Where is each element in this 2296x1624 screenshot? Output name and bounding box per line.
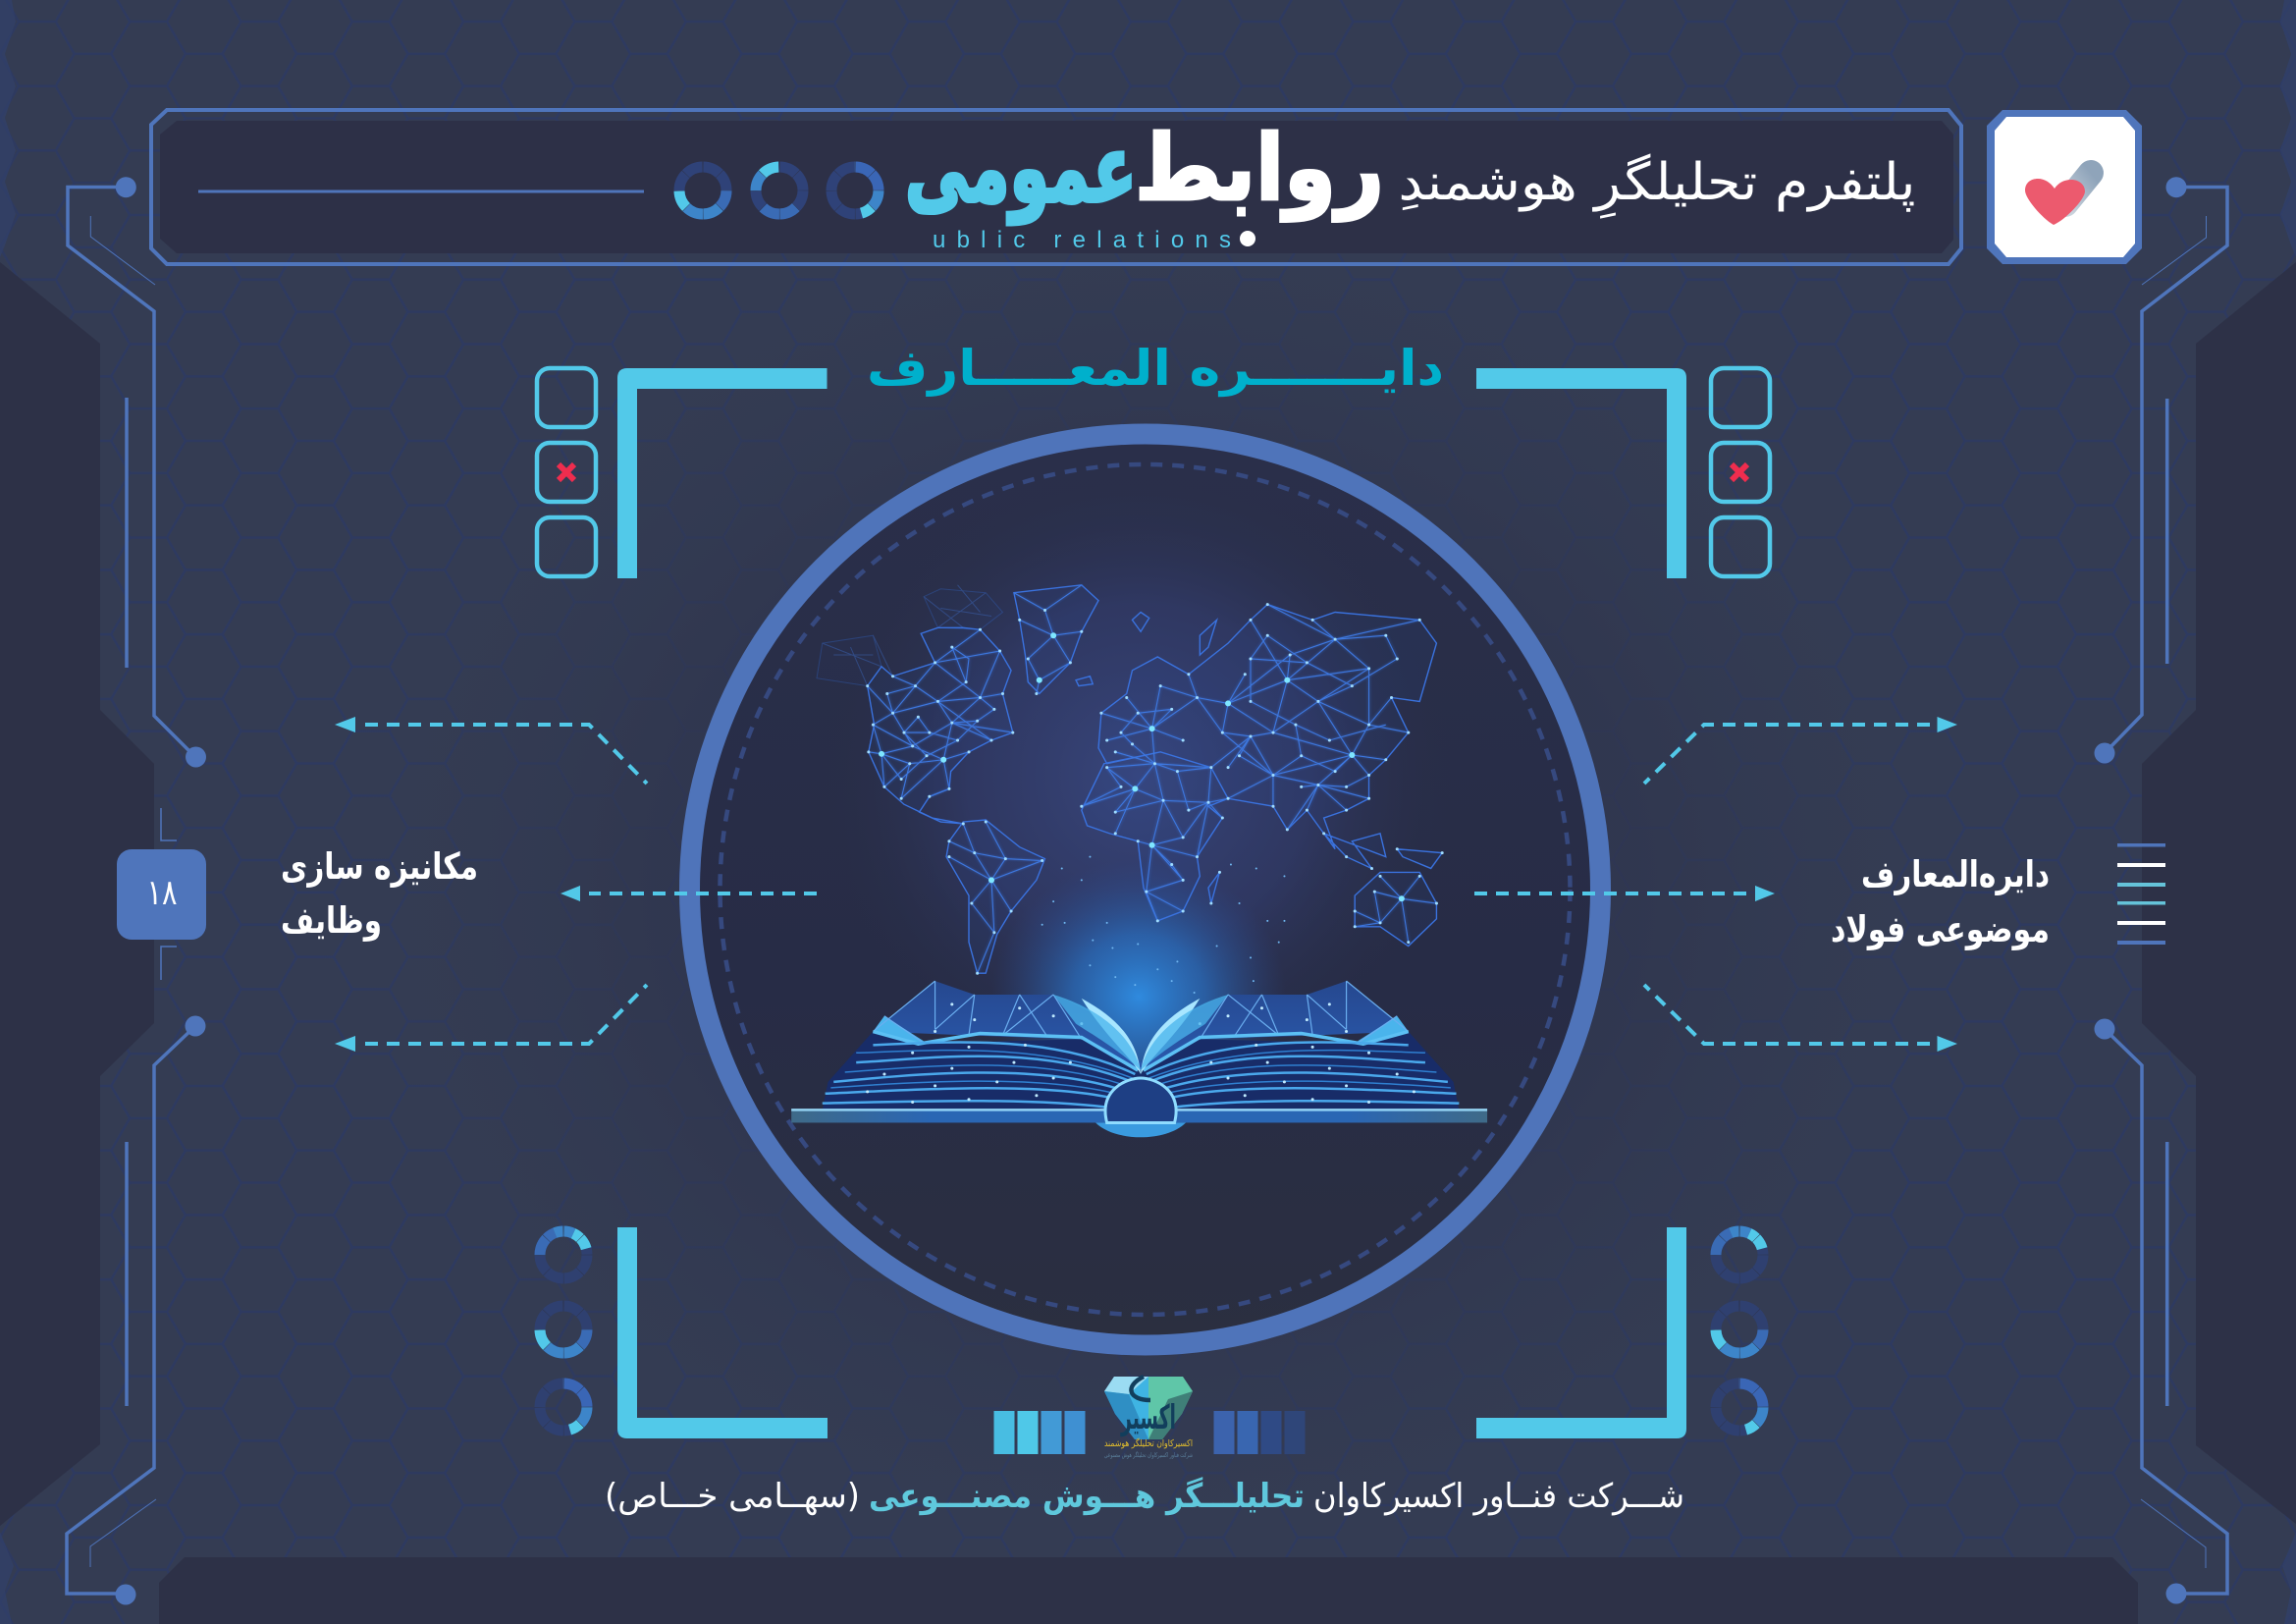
- footer company name: [605, 1477, 1684, 1516]
- left label: مکانیزه سازی: [281, 845, 478, 888]
- header frame: [151, 110, 1961, 264]
- bottom donut right 2: [1716, 1306, 1763, 1353]
- logo sub caption: شرکت فناور اکسیرکاوان تحلیلگر هوش مصنوعی: [1104, 1451, 1193, 1459]
- sparkles above the book: [1042, 857, 1284, 993]
- bottom donut left 1: [540, 1231, 587, 1278]
- icon: red cross: [559, 464, 574, 480]
- header donut 3: [831, 167, 879, 214]
- header title: پلتفرم تحلیلگرِ هوشمندِ: [1398, 153, 1916, 220]
- logo word cyan: عمومی: [905, 114, 1137, 225]
- icon: red cross right: [1732, 464, 1747, 480]
- continent outlines: [868, 585, 1442, 973]
- bracket: top right: [1476, 368, 1686, 578]
- network nodes: [868, 605, 1442, 973]
- arrow: left top: [335, 717, 647, 784]
- logo word white: روابط: [1135, 116, 1384, 222]
- central disc with world map and book: [687, 432, 1602, 1347]
- footer company name: (سهــامی خـــاص): [605, 1477, 860, 1516]
- arrow: right top: [1644, 717, 1957, 784]
- arrow: right bottom: [1644, 985, 1957, 1052]
- circuit line: bottom right: [2095, 1019, 2227, 1604]
- bottom donut left 2: [540, 1306, 587, 1353]
- circuit line: top left: [68, 177, 206, 767]
- circuit line: bottom left: [67, 1015, 206, 1604]
- bracket: bottom left: [617, 1227, 828, 1438]
- company logo gem: [1104, 1377, 1193, 1459]
- faint north west: [817, 585, 1002, 686]
- header donut 1: [679, 167, 726, 214]
- stripes right: [2117, 843, 2165, 945]
- company logo gem: اکسیر: [1120, 1398, 1176, 1437]
- bars left of logo: [993, 1411, 1086, 1454]
- bottom donut right 1: [1716, 1231, 1763, 1278]
- world map network: [791, 585, 1487, 1137]
- left label: [281, 845, 478, 942]
- bars right of logo: [1213, 1411, 1306, 1454]
- arrow: right middle: [1474, 886, 1775, 901]
- header donut 2: [756, 167, 803, 214]
- right label: دایره‌المعارف: [1861, 853, 2050, 895]
- page number badge: ۱۸: [147, 873, 177, 913]
- bracket: top left: [617, 368, 827, 578]
- footer company name: شـــرکت فنــاور اکسیرکاوان: [1313, 1477, 1684, 1516]
- right label: [1831, 853, 2050, 950]
- logo: public relations: [905, 114, 1384, 253]
- open book: [791, 981, 1487, 1137]
- logo caption: اکسیرکاوان تحلیلگر هوشمند: [1104, 1437, 1193, 1449]
- right label: موضوعی فولاد: [1831, 908, 2050, 950]
- footer company name: تحلیلـــگر هـــوش مصنـــوعی: [869, 1477, 1305, 1516]
- network lines: [868, 585, 1436, 973]
- network hubs: [881, 635, 1402, 898]
- logo subtitle: ublic relations: [933, 227, 1231, 253]
- header rule line: [198, 190, 644, 192]
- left label: وظایف: [281, 899, 382, 942]
- logo dot: [1240, 231, 1255, 246]
- arrow: left middle: [561, 886, 817, 901]
- bracket: bottom right: [1476, 1227, 1686, 1438]
- page number badge: [117, 808, 206, 980]
- network glow: [868, 585, 1436, 973]
- arrow: left bottom: [335, 985, 647, 1052]
- circuit line: top right: [2095, 177, 2227, 763]
- bottom donut right 3: [1716, 1383, 1763, 1431]
- checkboxes right: [1711, 368, 1770, 576]
- heading: encyclopedia: دایـــــــره المعـــــارف: [867, 340, 1444, 398]
- icon: check heart box: [1987, 110, 2142, 264]
- bottom donut left 3: [540, 1383, 587, 1431]
- checkboxes left: [537, 368, 596, 576]
